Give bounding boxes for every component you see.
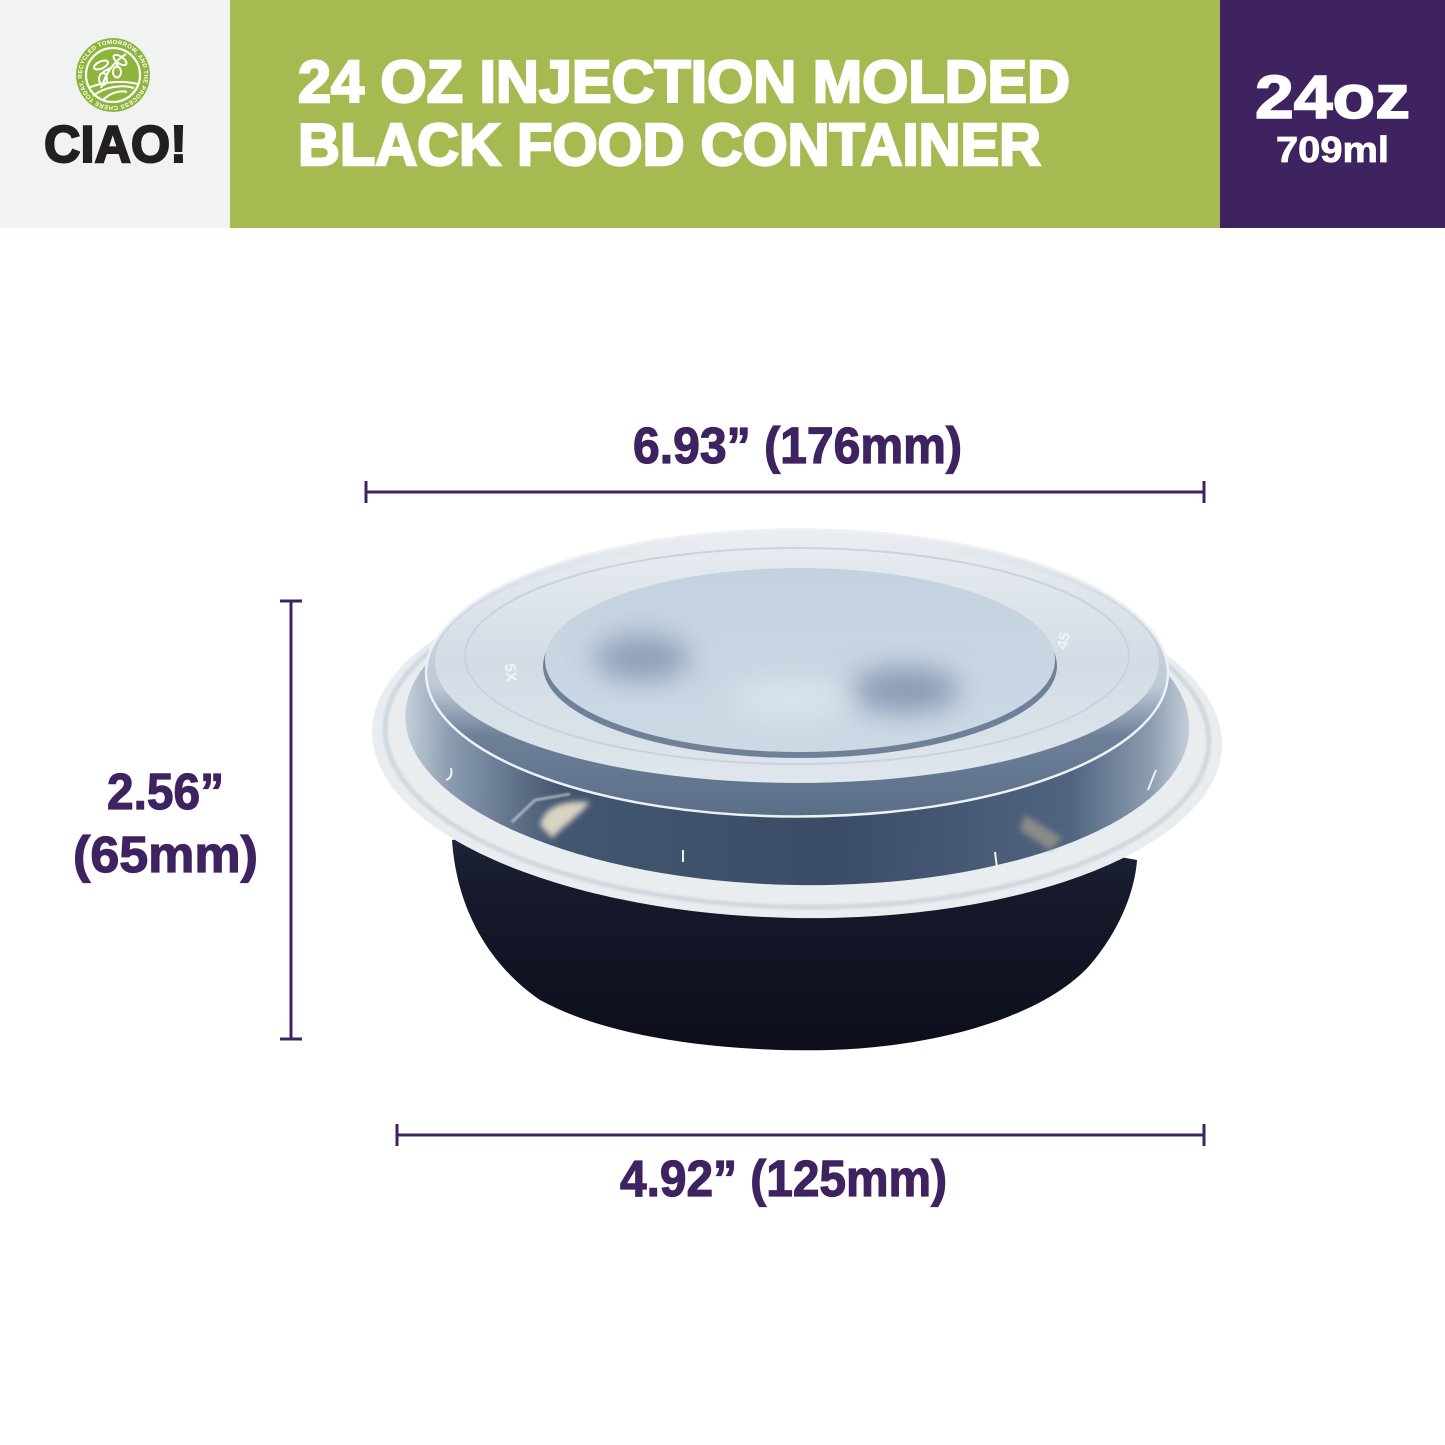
lid centre disc [543, 568, 1057, 758]
dimension: base width: 4.92” (125mm) [620, 1150, 947, 1207]
brand name: CIAO! [44, 116, 187, 174]
header: logo panel [0, 0, 230, 228]
capacity oz: 24oz [1255, 63, 1410, 131]
capacity ml: 709ml [1276, 129, 1389, 170]
dimension: top width [366, 417, 1204, 503]
header: capacity panel [1220, 0, 1445, 228]
dimension: height: 2.56” [107, 763, 224, 820]
title [298, 49, 1070, 178]
dimension: height: (65mm) [73, 826, 258, 883]
lid rim [369, 551, 1225, 925]
lid skirt over dark container [402, 552, 1192, 892]
title: 24 OZ INJECTION MOLDED [298, 49, 1070, 115]
title: BLACK FOOD CONTAINER [298, 112, 1041, 178]
dimension: top width: 6.93” (176mm) [633, 417, 962, 474]
container base [452, 800, 1137, 1050]
dimension: base width [397, 1124, 1204, 1207]
embossed lid marks: 45 [1053, 631, 1074, 651]
product: food container with lid [369, 529, 1225, 1050]
header: title banner [230, 0, 1220, 228]
dimension: height [73, 601, 302, 1039]
icon: olive badge [76, 38, 150, 112]
lid dome [425, 529, 1169, 817]
embossed lid marks: 5X [501, 663, 520, 683]
embossed lid marks [501, 631, 1074, 683]
